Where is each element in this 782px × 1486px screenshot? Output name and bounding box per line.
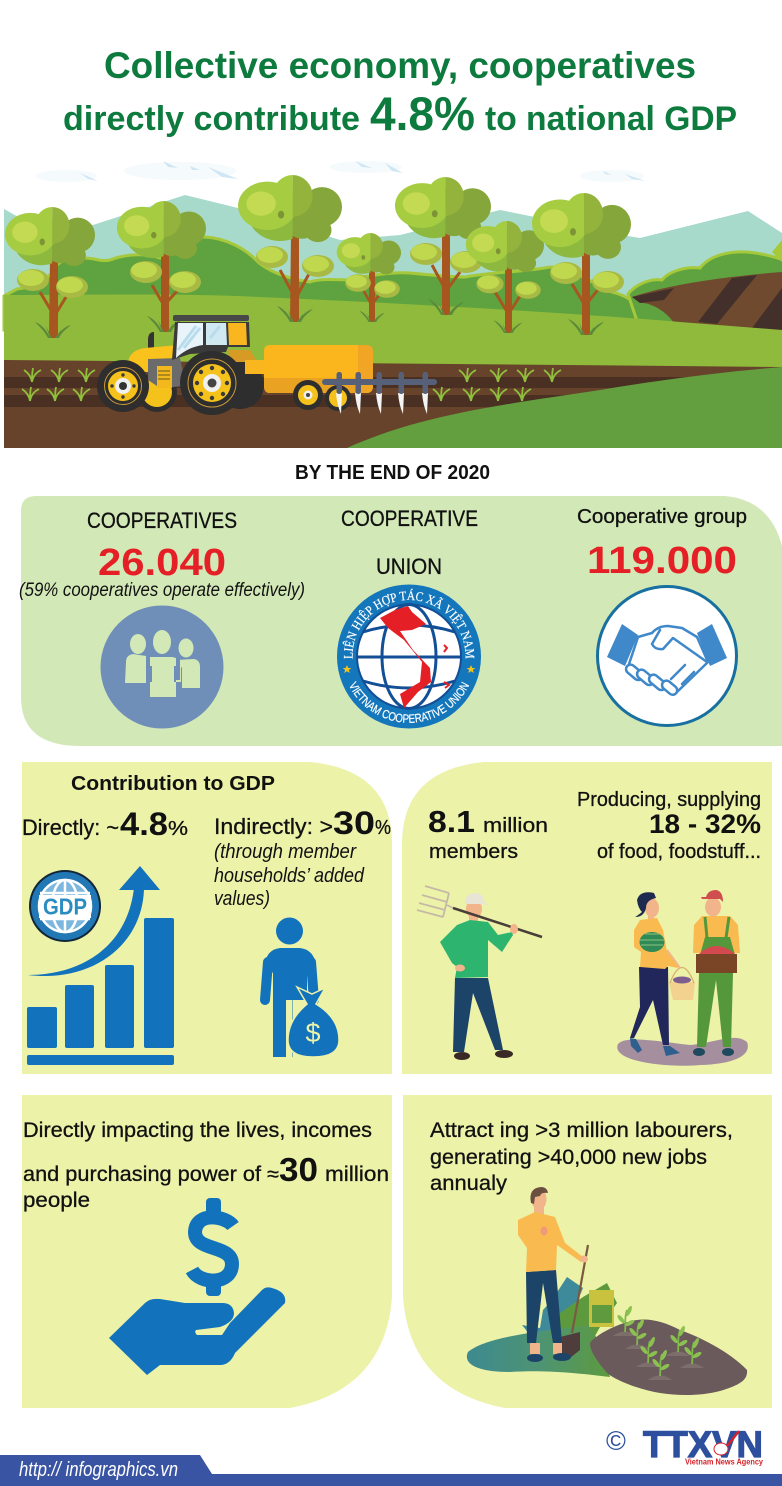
illustration: gardener with shovel and seedlings	[467, 1187, 747, 1395]
heading: by the end of 2020: BY THE END OF 2020	[295, 462, 490, 484]
icon: handshake	[598, 586, 736, 726]
background hills	[4, 237, 678, 330]
stat: directly: %	[168, 818, 188, 840]
text: impact statement: 30	[279, 1151, 318, 1188]
title	[63, 45, 737, 140]
mountains	[4, 195, 782, 330]
stat: food supply: of food, foodstuff...	[597, 841, 761, 863]
text: impact statement	[23, 1119, 389, 1212]
stat: food supply: Producing, supplying	[577, 789, 761, 811]
stat: indirectly: 30	[333, 805, 375, 841]
label: cooperative group: Cooperative group	[577, 506, 747, 528]
stat: indirectly	[214, 805, 391, 841]
logo: Vietnam Cooperative Union	[337, 584, 481, 728]
label: cooperative union: UNION	[376, 554, 442, 579]
title: to national GDP	[485, 100, 737, 138]
bright green field	[4, 294, 782, 368]
text: impact statement: million	[325, 1163, 389, 1186]
illustration: couple with produce	[617, 890, 748, 1066]
tree 5	[395, 177, 491, 315]
panel: members and food supply	[402, 762, 772, 1074]
number: 119.000: 119.000	[587, 540, 737, 582]
stat: directly: Directly: ~	[22, 815, 119, 840]
trailer tank	[264, 345, 373, 393]
stat: members: 8.1	[428, 804, 475, 839]
icon: GDP globe: GDP	[43, 894, 87, 920]
note: through member households: households’ added	[214, 865, 365, 887]
logo: Vietnam Cooperative Union: VIETNAM COOPERATIVE UNION	[350, 680, 470, 723]
note: effective share: (59% cooperatives operate effectively)	[19, 580, 305, 601]
icon: person with money bag: $	[305, 1018, 321, 1048]
logo: TTXVN Vietnam News Agency: ©	[606, 1426, 626, 1456]
woman	[630, 892, 695, 1056]
text: impact statement: and purchasing power of ≈	[23, 1163, 279, 1186]
stat: directly: 4.8	[120, 806, 168, 842]
stat: indirectly: %	[375, 817, 391, 839]
illustration: farmer with pitchfork	[417, 886, 542, 1060]
harrow	[322, 372, 437, 414]
tree 3	[238, 175, 342, 322]
trailer wheels	[293, 380, 351, 411]
tree 1	[5, 207, 95, 338]
text: jobs statement: generating >40,000 new jobs	[430, 1146, 707, 1169]
text: jobs statement: Attract ing >3 million labourers,	[430, 1119, 733, 1142]
text: impact statement: Directly impacting the lives, incomes	[23, 1119, 372, 1142]
tractor	[97, 315, 266, 415]
label: cooperative union	[341, 506, 478, 579]
title: Collective economy, cooperatives	[104, 45, 696, 86]
illustration: farm landscape with tractor	[4, 161, 782, 448]
panel: end-of-2020 counts	[19, 496, 782, 746]
panel: impact on lives	[22, 1095, 392, 1408]
seedlings	[22, 368, 561, 401]
stat: indirectly: Indirectly: >	[214, 814, 333, 839]
stat: directly	[22, 806, 188, 842]
tree 4	[337, 233, 401, 322]
tree 6	[466, 221, 544, 333]
logo: TTXVN Vietnam News Agency: Vietnam News Agency	[685, 1458, 764, 1466]
title: 4.8%	[370, 87, 475, 140]
chart: rising bars with arrow	[27, 866, 174, 1065]
text: jobs statement: annualy	[430, 1172, 508, 1195]
footer band with url	[0, 1455, 782, 1486]
icon: dollar sign over open hand	[109, 1198, 285, 1375]
logo: Vietnam Cooperative Union: LIÊN HIỆP HỢP TÁC XÃ VIỆT NAM	[342, 588, 474, 659]
text: jobs statement	[430, 1119, 733, 1195]
stat: members: members	[429, 841, 518, 863]
clouds	[35, 161, 645, 182]
logo: TTXVN Vietnam News Agency: TTXVN	[643, 1424, 763, 1465]
stat: members	[428, 804, 548, 863]
note: through member households	[214, 841, 365, 910]
panel: jobs and labourers	[403, 1095, 772, 1408]
note: through member households: values)	[214, 888, 270, 910]
icon: person with money bag	[265, 918, 339, 1058]
ploughed hill	[632, 272, 782, 330]
number: 26.040: 26.040	[98, 542, 226, 584]
label: cooperatives: COOPERATIVES	[87, 508, 237, 533]
label: cooperative union: COOPERATIVE	[341, 506, 478, 531]
stat: food supply: 18 - 32%	[649, 809, 761, 839]
footer band with url: http:// infographics.vn	[19, 1459, 178, 1481]
stat: food supply	[577, 789, 761, 863]
green meadow	[347, 367, 782, 448]
tree 2	[117, 201, 206, 332]
brown soil	[4, 360, 782, 448]
note: through member households: (through member	[214, 841, 357, 863]
heading: contribution to GDP: Contribution to GDP	[71, 773, 275, 795]
man	[693, 890, 740, 1056]
stat: members: million	[483, 815, 548, 837]
title: directly contribute	[63, 100, 360, 138]
panel: contribution to GDP	[22, 762, 392, 1074]
icon: group of people	[100, 606, 224, 728]
text: impact statement: people	[23, 1189, 90, 1212]
tree 7	[532, 193, 631, 335]
icon: GDP globe	[29, 870, 101, 942]
